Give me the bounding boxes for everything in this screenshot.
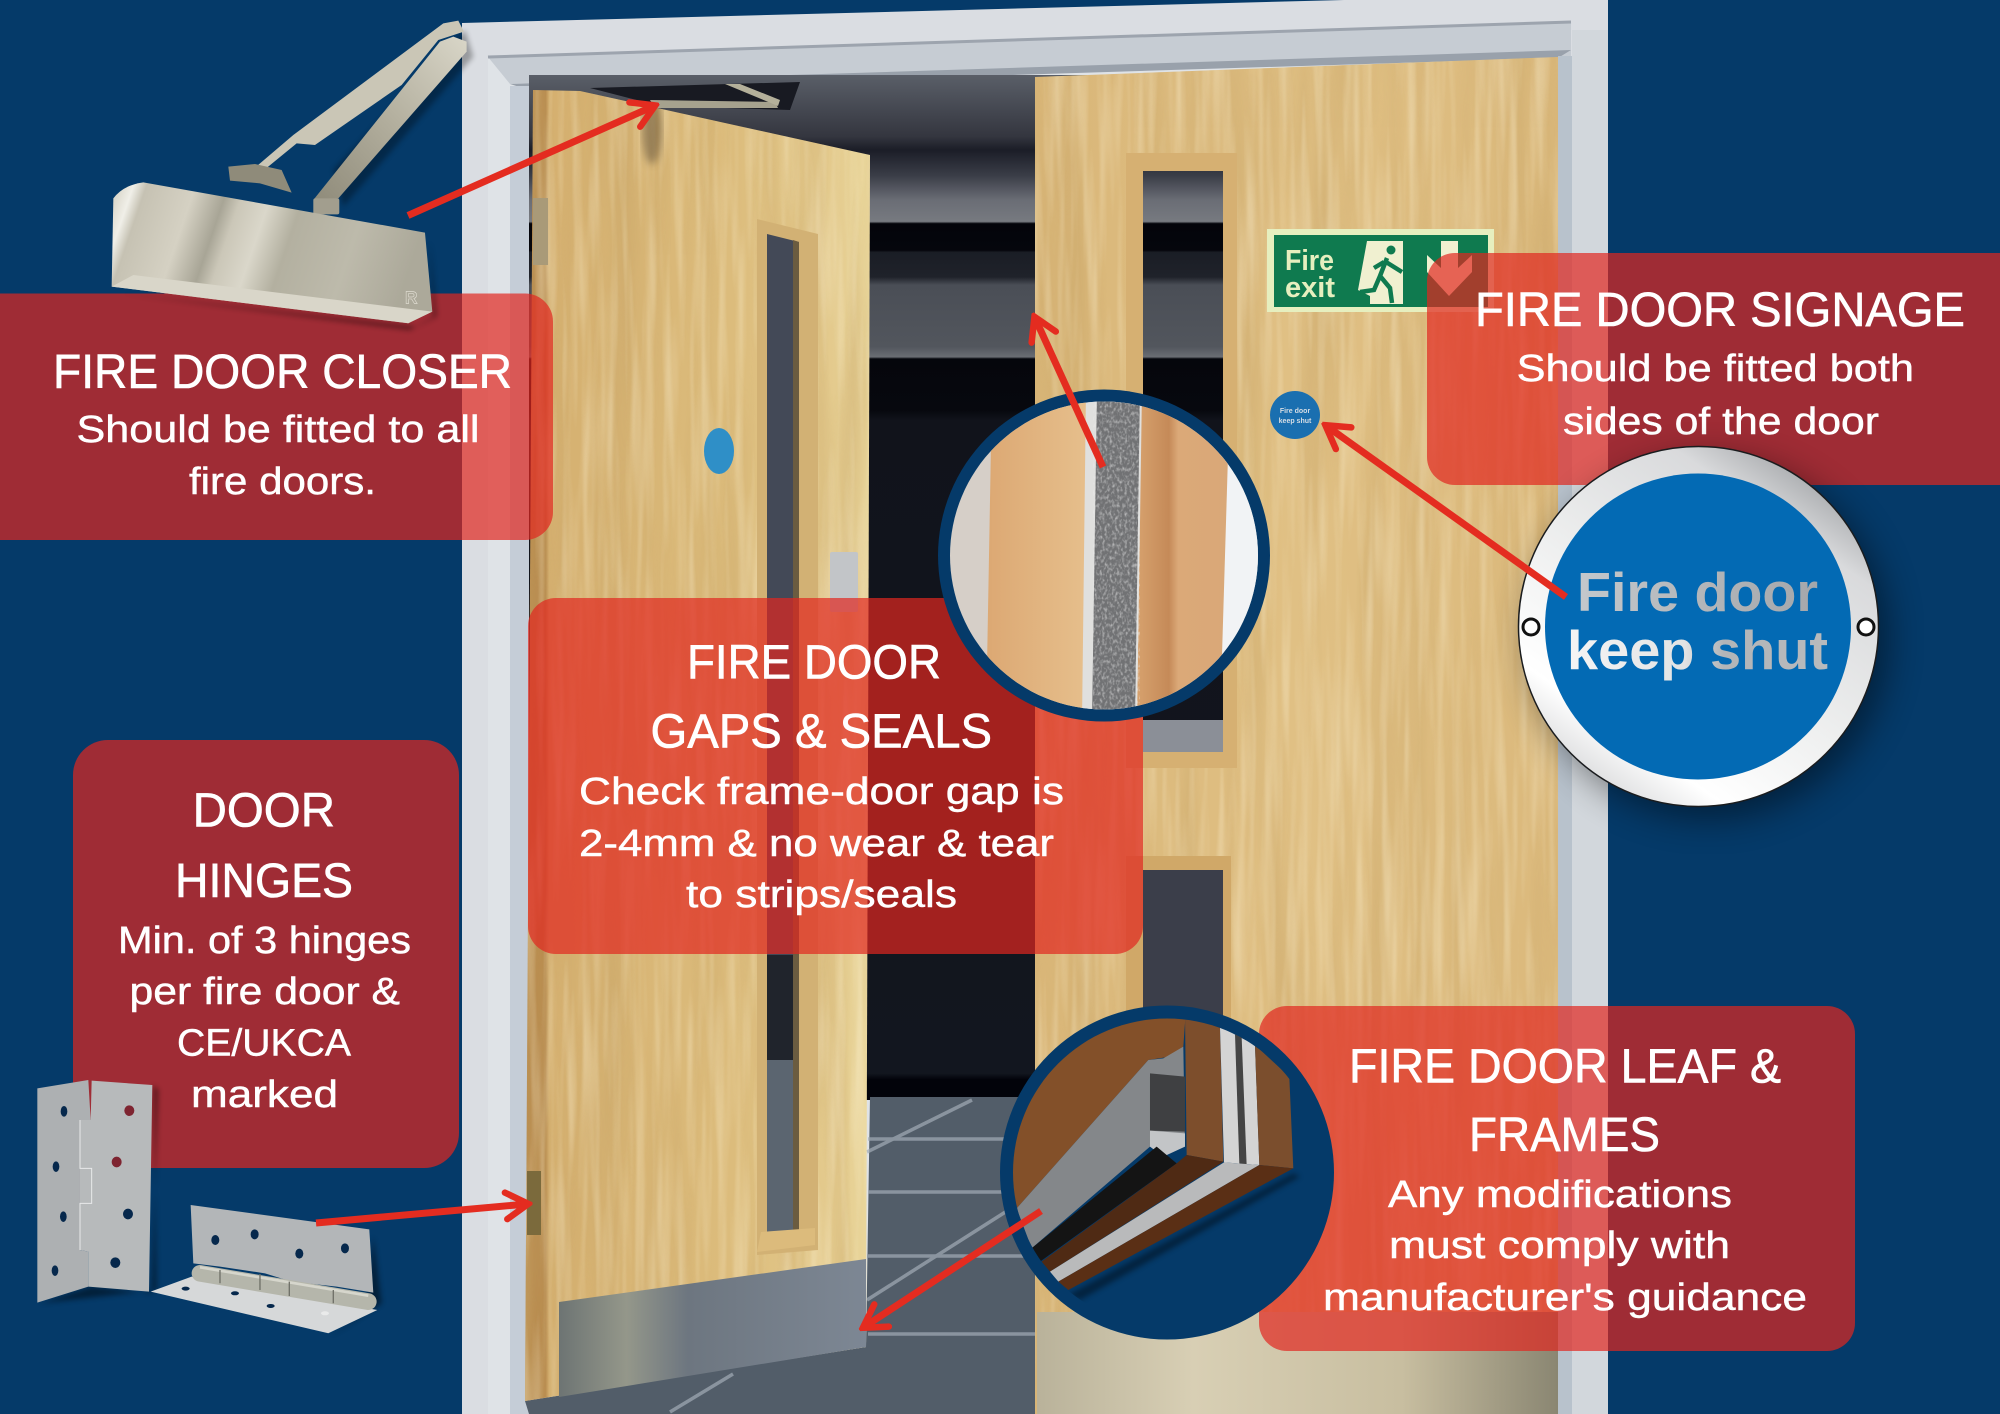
illustration: door closer <box>112 21 473 330</box>
small fire door keep shut sign: Fire door <box>1280 408 1310 415</box>
closer long arm <box>313 37 467 200</box>
arrow: sign to small door sign <box>1326 426 1566 597</box>
sign text: fire exit <box>1285 245 1335 304</box>
arrow: seal to door gap <box>1035 318 1103 467</box>
text: leaf description: must comply with <box>1389 1225 1730 1267</box>
left door kick plate <box>559 1259 866 1397</box>
right door leaf <box>1035 50 1558 1414</box>
text: leaf description: Any modifications <box>1388 1174 1732 1216</box>
right door upper vision panel <box>1126 153 1237 768</box>
text: gaps description <box>579 771 1064 916</box>
top hinge <box>533 198 548 265</box>
panel: door leaf and frames <box>1259 1006 1855 1351</box>
sign wording <box>1567 561 1828 681</box>
text: closer description: fire doors. <box>189 461 376 503</box>
heading: fire door gaps and seals <box>650 636 992 758</box>
circular inset: door leaf cross-section <box>1000 1000 1334 1340</box>
closer body <box>112 182 432 323</box>
arrow: hinge to door hinge <box>316 1204 527 1223</box>
closer body lip <box>112 275 432 323</box>
text: gaps description: 2-4mm & no wear & tear <box>579 823 1054 865</box>
bottom hinge <box>527 1171 541 1235</box>
panel: fire door signage <box>1427 253 2000 485</box>
left door leaf <box>520 80 880 1410</box>
heading: door hinges: HINGES <box>175 855 353 908</box>
room interior <box>525 75 1558 1414</box>
text: hinges description: marked <box>191 1074 338 1116</box>
illustration: fire door keep shut sign <box>1518 446 1888 818</box>
upright hinge <box>37 1080 158 1303</box>
arrow: leaf section to door edge <box>864 1211 1041 1327</box>
text: signage description <box>1517 348 1914 443</box>
panel: gaps and seals <box>528 598 1143 954</box>
closer spindle <box>313 198 339 214</box>
illustration: hinges <box>37 1080 382 1337</box>
heading: fire door leaf and frames: FRAMES <box>1469 1109 1660 1162</box>
closer bracket <box>228 164 292 193</box>
circular inset: door seal strip <box>938 389 1270 722</box>
heading: door hinges <box>175 784 353 908</box>
text: signage description: sides of the door <box>1563 401 1879 443</box>
inset drop shadow <box>1068 1173 1300 1300</box>
text: hinges description: Min. of 3 hinges <box>118 920 411 962</box>
right door kick plate <box>1037 1312 1558 1414</box>
text: signage description: Should be fitted both <box>1517 348 1914 390</box>
panel: fire door closer <box>0 294 553 540</box>
text: leaf description <box>1323 1174 1807 1319</box>
closer upper arm <box>248 21 464 173</box>
left door vision panel <box>757 219 818 1255</box>
text: gaps description: Check frame-door gap is <box>579 771 1064 813</box>
closer logo: R <box>405 287 418 307</box>
panel: door hinges <box>73 740 459 1168</box>
arrow: closer to door top <box>408 106 654 216</box>
sign runner pictogram <box>1358 241 1403 304</box>
door photo <box>462 0 1608 1414</box>
left door blue sign <box>704 428 734 474</box>
text: closer description <box>76 409 479 503</box>
text: hinges description <box>118 920 411 1116</box>
sign wording: Fire door <box>1577 561 1818 623</box>
text: hinges description: per fire door & <box>130 971 400 1013</box>
heading: fire door signage: FIRE DOOR SIGNAGE <box>1475 284 1965 337</box>
text: gaps description: to strips/seals <box>686 874 957 916</box>
door frame <box>462 0 1608 1414</box>
text: leaf description: manufacturer's guidance <box>1323 1277 1807 1319</box>
small fire door keep shut sign: keep shut <box>1279 418 1312 425</box>
sign screw holes <box>1523 619 1874 635</box>
heading: fire door closer: FIRE DOOR CLOSER <box>53 346 512 399</box>
sign down arrow <box>1427 241 1472 296</box>
heading: fire door leaf and frames: FIRE DOOR LEAF & <box>1349 1041 1781 1094</box>
heading: door hinges: DOOR <box>193 784 335 838</box>
right door lower vision panel <box>1126 856 1231 1060</box>
heading: fire door leaf and frames <box>1349 1041 1781 1162</box>
heading: fire door gaps and seals: GAPS & SEALS <box>650 706 992 758</box>
fire exit sign <box>1267 229 1494 312</box>
heading: fire door gaps and seals: FIRE DOOR <box>687 636 941 690</box>
sign text: fire exit: exit <box>1285 272 1335 304</box>
left door push plate <box>830 552 858 612</box>
small fire door keep shut sign <box>1270 391 1320 439</box>
flat open hinge <box>151 1205 382 1337</box>
text: hinges description: CE/UKCA <box>177 1022 352 1064</box>
closer arm inside doorway <box>590 82 800 110</box>
sign wording: keep shut <box>1567 619 1828 681</box>
text: closer description: Should be fitted to all <box>76 409 479 451</box>
sign text: fire exit: Fire <box>1285 245 1334 277</box>
